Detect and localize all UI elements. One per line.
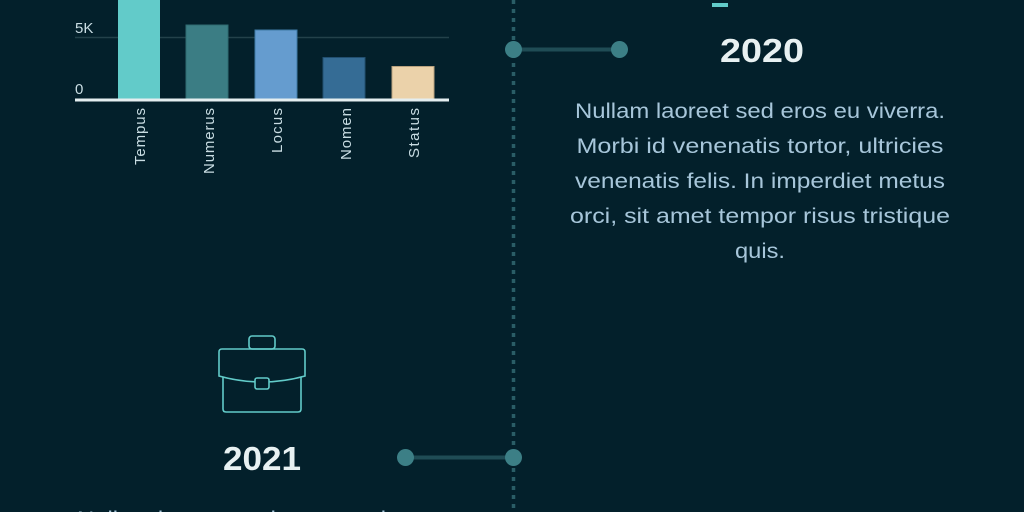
connector 2020 [505,41,628,58]
text block 2020: orci, sit amet tempor risus tristique [570,205,950,228]
icon: briefcase [219,336,305,412]
bar: Tempus [118,0,160,99]
category labels: Nomen [338,108,355,160]
text block 2020: venenatis felis. In imperdiet metus [575,170,945,193]
category labels: Tempus [132,108,149,165]
category labels [132,108,423,174]
axis label 0: 0 [75,81,83,98]
axis label 5K: 5K [75,20,93,37]
bar: Nomen [323,58,365,99]
category labels: Locus [269,108,286,153]
timeline vertical dotted line [512,0,515,512]
connector 2021 [397,449,522,466]
text block 2020 [570,100,950,263]
bar chart [75,0,449,174]
bar: Numerus [186,25,228,99]
heading 2020: 2020 [720,32,804,69]
bar: Locus [255,30,297,99]
bar: Status [392,66,434,99]
text block 2020: Morbi id venenatis tortor, ultricies [576,135,944,158]
category labels: Status [406,108,423,158]
text block 2020: quis. [735,240,785,263]
category labels: Numerus [201,108,218,174]
text block 2020: Nullam laoreet sed eros eu viverra. [575,100,945,123]
heading 2021: 2021 [223,440,301,477]
icon fragment 2020 [712,3,728,7]
